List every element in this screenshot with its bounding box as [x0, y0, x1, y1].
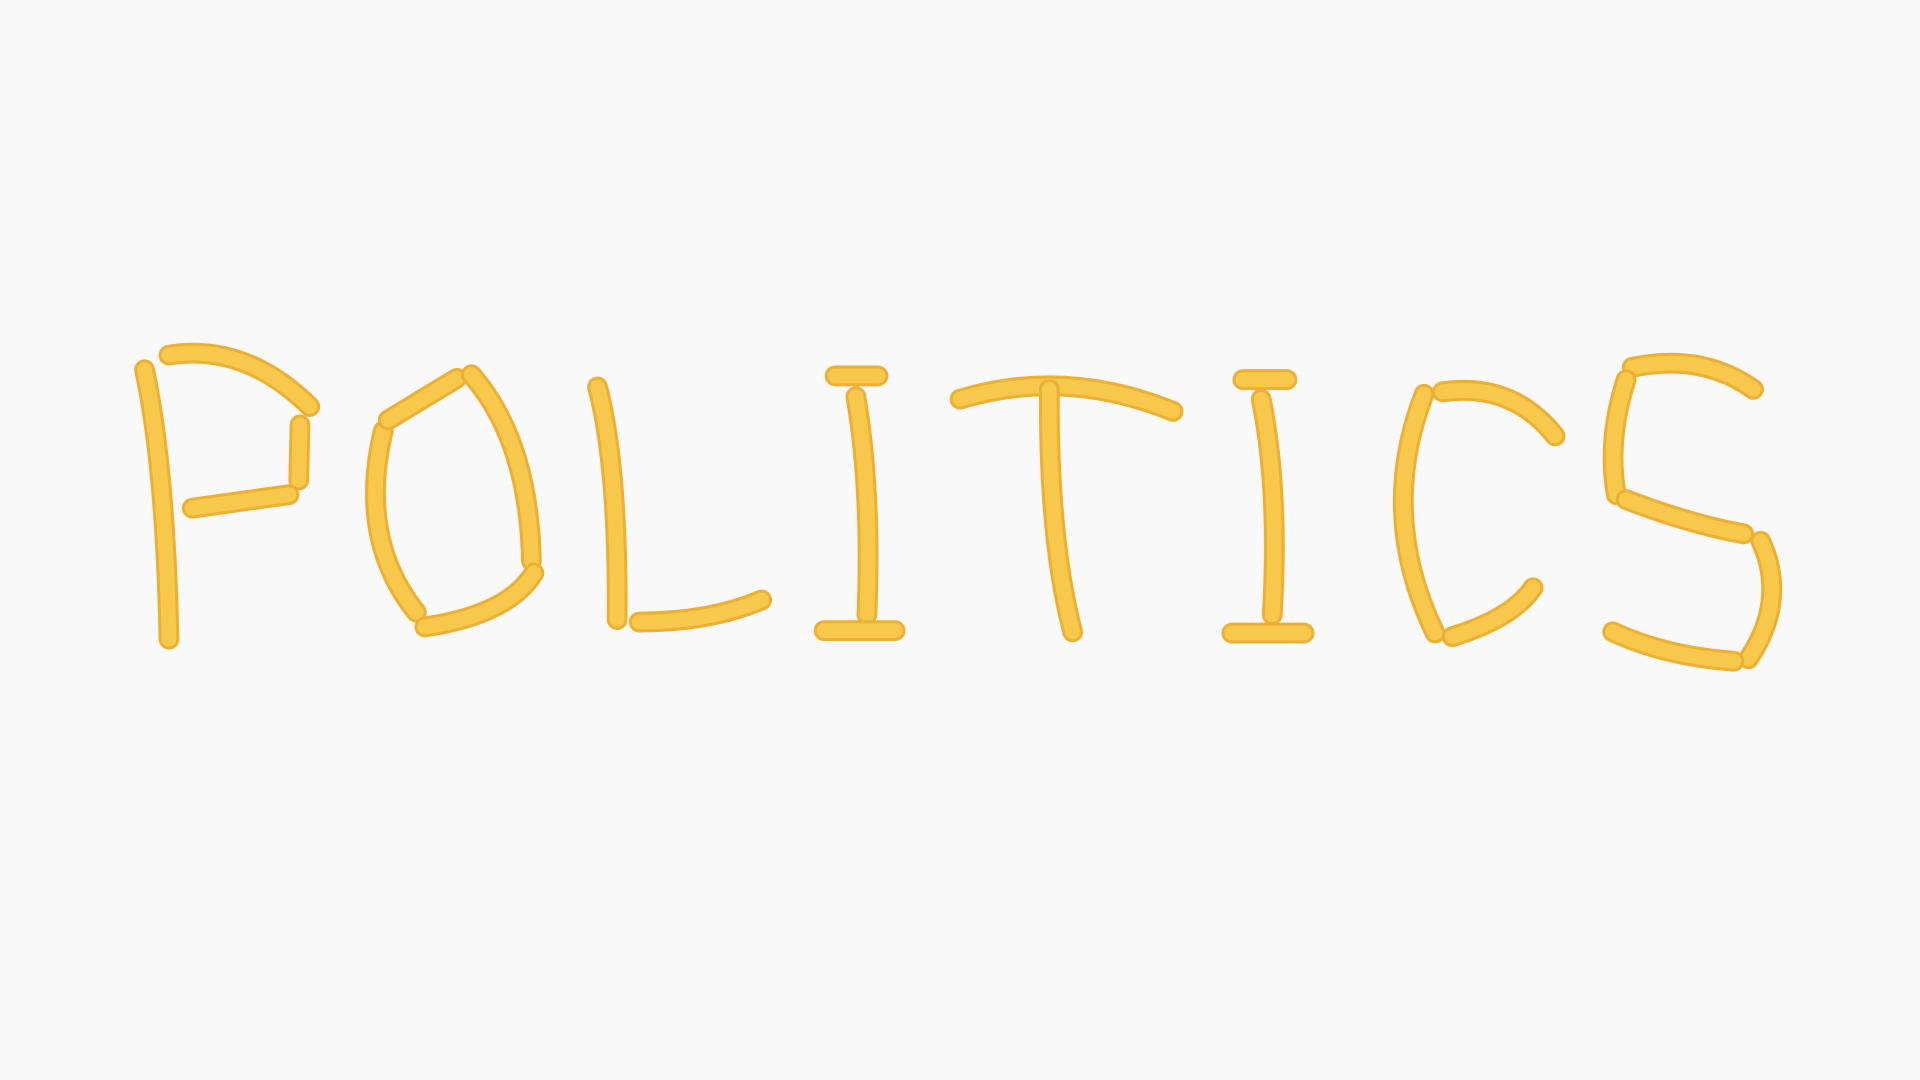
letter I — [824, 376, 895, 631]
letter T — [960, 386, 1173, 632]
letter L — [598, 387, 762, 622]
letter C — [1403, 390, 1555, 637]
letter P — [144, 353, 310, 639]
letter O — [375, 375, 534, 627]
letter I — [1232, 380, 1304, 633]
letter S — [1613, 363, 1772, 661]
title text: POLITICS — [263, 262, 1657, 604]
